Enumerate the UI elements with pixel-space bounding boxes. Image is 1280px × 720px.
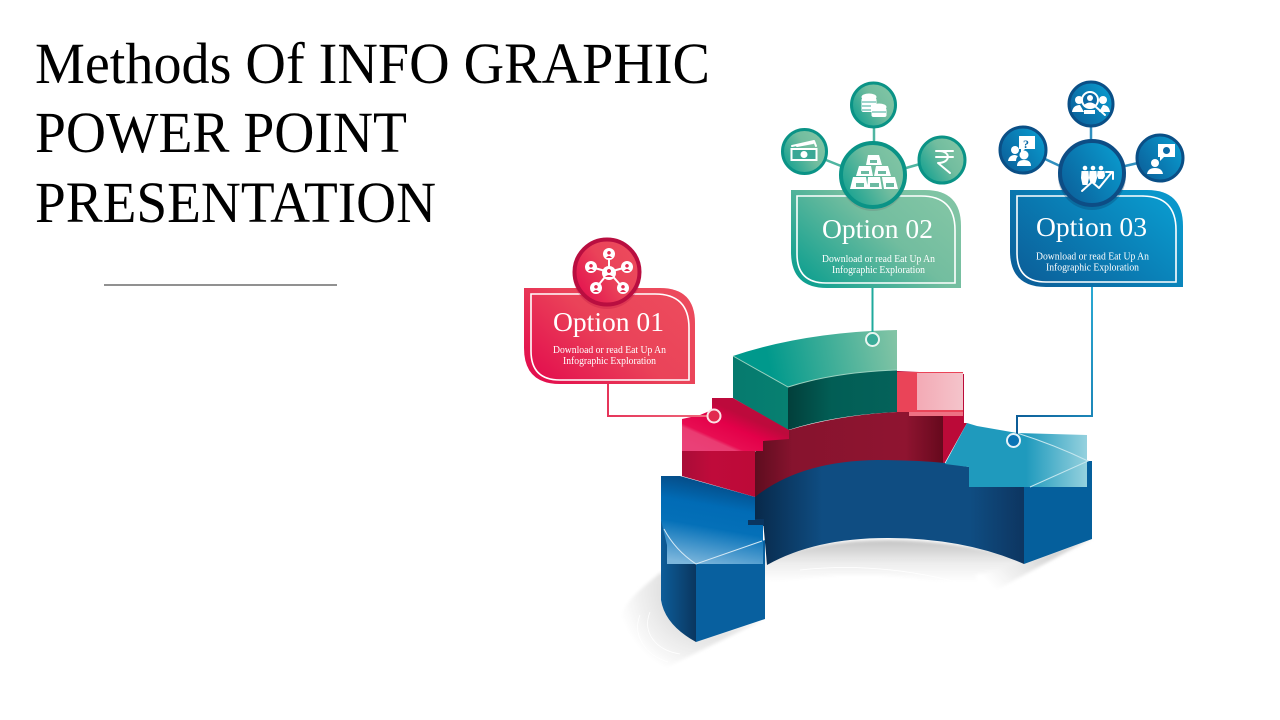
option 03 description: [1036, 252, 1149, 274]
title: Methods Of INFO GRAPHIC: [35, 31, 710, 96]
option 03 heading: Option 03: [1036, 212, 1147, 242]
icon: idea chat: [1137, 135, 1183, 181]
option 01 heading: Option 01: [553, 307, 664, 337]
option 03 description: Infographic Exploration: [1046, 262, 1139, 274]
title: [35, 31, 710, 235]
card background: [524, 288, 695, 384]
title underline: [104, 284, 337, 286]
card background: [1010, 190, 1183, 287]
panel: option 02: [782, 83, 965, 288]
shadow streaks: [638, 568, 985, 662]
icon: question chat: [1000, 127, 1046, 173]
option 02 description: Download or read Eat Up An: [822, 254, 935, 265]
marker: option 02: [866, 333, 879, 346]
icon: team growth: [1058, 141, 1126, 210]
icon: coins: [852, 83, 896, 127]
panel: option 01: [524, 240, 695, 384]
card background: [791, 190, 961, 288]
title: PRESENTATION: [35, 170, 436, 235]
icon: banknotes: [782, 130, 826, 174]
icon: network of people: [573, 240, 641, 309]
connector: option 02: [872, 287, 874, 333]
connector: option 01: [608, 383, 707, 416]
icon: rupee: [919, 137, 965, 183]
ground shadow: [620, 538, 1092, 673]
icon: gold bars: [840, 143, 906, 211]
icon: people search: [1069, 82, 1113, 126]
card white inset border: [797, 196, 955, 283]
blue right block: [945, 423, 1092, 564]
spokes: [826, 128, 920, 168]
card white inset border: [531, 294, 689, 380]
option 02 description: Infographic Exploration: [832, 265, 925, 276]
title: POWER POINT: [35, 100, 407, 165]
red segment: [682, 371, 967, 500]
card white inset border: [1017, 196, 1176, 282]
connector: option 03: [1017, 287, 1092, 434]
icon: question chat: ?: [1023, 137, 1029, 151]
option 01 description: Download or read Eat Up An: [553, 345, 666, 356]
3D stepped arc chart: [620, 330, 1092, 673]
option 02 heading: Option 02: [822, 214, 933, 244]
marker: option 03: [1007, 434, 1020, 447]
blue left block: [661, 476, 765, 642]
green segment: [733, 330, 897, 430]
blue band: [755, 460, 1024, 565]
option 01 description: Infographic Exploration: [563, 356, 656, 367]
marker: option 01: [708, 410, 720, 422]
option 03 description: Download or read Eat Up An: [1036, 252, 1149, 262]
panel: option 03: [1000, 82, 1183, 287]
option 02 description: [822, 254, 935, 276]
spokes: [1045, 127, 1138, 166]
option 01 description: [553, 345, 666, 367]
